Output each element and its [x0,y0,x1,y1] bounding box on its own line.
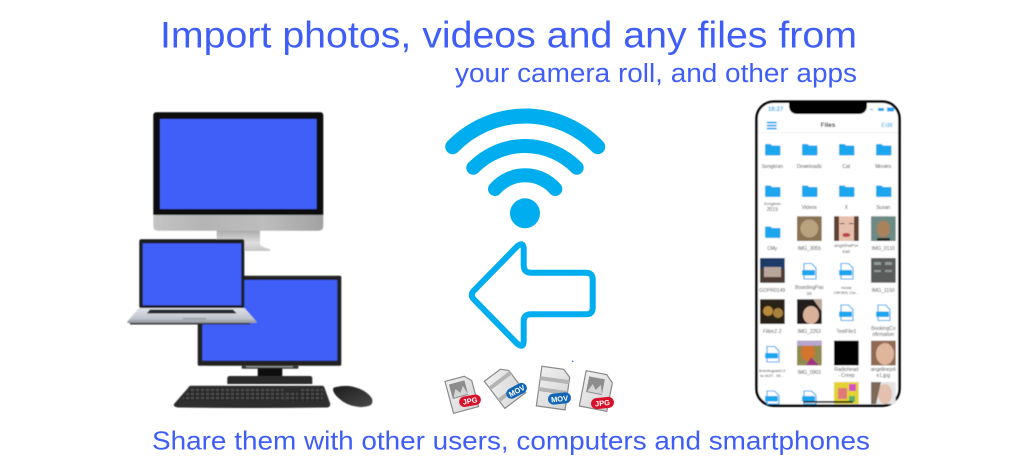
icon: flat-screen monitor [198,276,341,384]
icon: desktop all-in-one computer [153,112,323,251]
file labels: IMG_0903 [798,370,821,376]
file labels: ss [807,291,812,297]
icon: JPG file: JPG [595,398,611,408]
file labels: Radiohead [834,367,859,373]
nav bar edit: Edit [881,122,893,129]
thumbnails [760,216,896,404]
file labels: Olily [767,246,778,252]
icon: MOV file [536,366,572,410]
icon: laptop [127,239,256,324]
file labels: 2019 [767,207,778,213]
file labels: BoardingPas [795,285,824,291]
status icons [870,108,894,112]
file labels: for BUIT - SE… [760,374,785,378]
file labels: IMG_1150 [872,288,895,294]
icon: MOV file [484,366,529,408]
file labels: Cat [842,164,851,170]
icon: computer mouse [333,386,372,407]
nav bar title: Files [821,122,836,129]
file labels: Songkran [764,201,781,206]
file labels: angelinejoli [871,367,896,373]
subtitle: your camera roll, and other apps [455,60,857,88]
file labels: Movies [875,164,892,170]
phone body [756,102,900,406]
icon: MOV file: MOV [507,383,526,399]
footer caption: Share them with other users, computers and smartphones [152,426,870,456]
icon: keyboard [174,386,330,408]
file labels: BoardingpassCX [759,369,786,373]
icon: wifi signal [453,116,598,228]
icon: MOV file: MOV [551,394,569,404]
file labels: TextFile1 [836,329,857,335]
file labels: e1.jpg [876,373,890,379]
file labels: X [845,205,849,211]
icon: left arrow [472,244,593,346]
file labels: CRF250L Che… [833,291,860,295]
file labels: BookingCo [871,326,896,332]
file labels: Videos [802,205,817,211]
title: Import photos, videos and any files from [160,14,857,56]
file labels: GOPR0149 [759,288,785,294]
computers group [127,112,372,408]
file labels: IMG_3055 [798,246,821,252]
file labels: IMG_0110 [872,246,895,252]
file labels: trait [843,249,851,254]
file labels: nfirmation [872,332,894,338]
document icons [767,264,890,404]
file labels: Susan [876,205,891,211]
phone notch [789,102,867,114]
icon: JPG file: JPG [462,395,478,407]
icon: JPG file [445,375,482,413]
file labels: FilterZ-2 [763,329,782,335]
home indicator [803,401,853,403]
folder grid [765,144,892,238]
status bar time: 16:27 [768,107,784,113]
file labels: Songkran [762,164,783,170]
file labels [759,164,896,379]
file labels: - Creep [838,373,855,379]
file labels: IMG_2253 [798,329,821,335]
file labels: angelinaPor [834,243,859,248]
file labels: Downloads [797,164,822,170]
icon: JPG file [579,371,615,411]
file icons row [445,360,615,413]
file labels: Honda [841,286,852,290]
phone mockup [756,102,900,406]
nav bar menu icon [767,122,776,129]
document badges [765,270,889,402]
